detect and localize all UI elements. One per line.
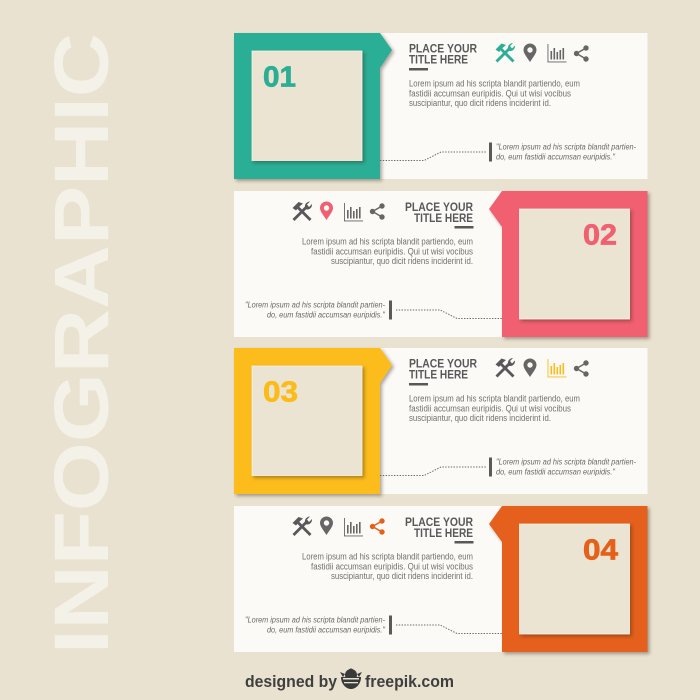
icon: share	[370, 519, 384, 534]
body text: fastidii accumsan euripidis. Qui ut wisi vocibus	[409, 404, 572, 414]
heading: TITLE HERE	[414, 211, 473, 225]
icon: tools	[292, 201, 312, 221]
quote text: "Lorem ipsum ad his scripta blandit partien-	[496, 142, 636, 152]
icon: tools	[496, 43, 515, 62]
body text: suscipiantur, quo dicit ridens inciderint id.	[409, 98, 551, 108]
heading: PLACE YOUR	[405, 200, 473, 214]
inner card	[252, 366, 362, 476]
pink tab with arrow	[489, 191, 648, 337]
quote text	[496, 456, 636, 476]
icon: tools	[496, 358, 515, 378]
inner card	[252, 51, 362, 160]
panel: step 01	[234, 33, 648, 179]
icon: freepik logo	[340, 668, 362, 689]
quote bar	[489, 142, 492, 162]
inner card	[520, 524, 630, 634]
heading underline	[409, 68, 428, 70]
quote text: do, eum fastidii accumsan euripidis."	[496, 466, 616, 476]
body text: fastidii accumsan euripidis. Qui ut wisi vocibus	[311, 246, 474, 256]
icon: map pin	[524, 44, 536, 62]
quote text	[245, 614, 386, 634]
icon: map pin	[320, 202, 333, 220]
heading underline	[454, 226, 474, 228]
icon: tools	[292, 516, 312, 536]
icon: share	[574, 46, 588, 61]
heading	[409, 41, 477, 67]
heading: TITLE HERE	[409, 368, 468, 382]
icon: bar chart	[548, 44, 566, 62]
heading	[405, 515, 473, 540]
yellow tab with arrow	[234, 348, 392, 494]
number: 04	[583, 534, 618, 566]
heading underline	[409, 383, 428, 386]
icon: share	[574, 361, 588, 376]
heading: PLACE YOUR	[409, 41, 477, 55]
quote text: "Lorem ipsum ad his scripta blandit partien-	[496, 456, 636, 466]
heading underline	[454, 541, 474, 544]
icon: share	[370, 204, 384, 219]
panel: step 03	[234, 348, 648, 494]
heading: TITLE HERE	[409, 53, 468, 67]
quote text	[496, 142, 636, 162]
quote bar	[489, 458, 492, 476]
dotted connector	[380, 152, 486, 160]
body text: Lorem ipsum ad his scripta blandit partiendo, eum	[409, 394, 580, 404]
body text: suscipiantur, quo dicit ridens inciderint id.	[409, 413, 551, 423]
heading: TITLE HERE	[414, 526, 473, 540]
quote text: "Lorem ipsum ad his scripta blandit partien-	[245, 614, 385, 624]
quote bar	[389, 300, 392, 320]
quote text: do, eum fastidii accumsan euripidis."	[267, 624, 386, 634]
body text: suscipiantur, quo dicit ridens inciderint id.	[331, 571, 473, 581]
icon: bar chart	[548, 359, 566, 377]
heading: PLACE YOUR	[409, 356, 477, 370]
freepik.com text: freepik.com	[365, 672, 454, 691]
quote bar	[389, 616, 392, 634]
body text: Lorem ipsum ad his scripta blandit partiendo, eum	[302, 552, 473, 562]
body text	[302, 236, 474, 266]
dotted connector	[380, 467, 486, 476]
panel background	[234, 348, 648, 494]
heading	[409, 356, 477, 382]
teal tab with arrow	[234, 33, 392, 179]
vertical watermark title: INFOGRAPHIC	[39, 33, 125, 654]
panel background	[234, 33, 648, 179]
body text	[302, 552, 474, 581]
icon: bar chart	[344, 518, 363, 536]
body text: suscipiantur, quo dicit ridens inciderint id.	[331, 256, 473, 266]
panel background	[234, 191, 648, 337]
panel background	[234, 506, 648, 652]
quote text: do, eum fastidii accumsan euripidis."	[267, 310, 386, 320]
body text: Lorem ipsum ad his scripta blandit partiendo, eum	[302, 236, 473, 246]
panel: step 04	[234, 506, 648, 652]
icon: map pin	[320, 516, 333, 535]
number: 01	[263, 62, 296, 94]
number: 03	[263, 376, 298, 408]
inner card	[520, 209, 630, 319]
body text	[409, 78, 580, 108]
icon: map pin	[524, 358, 536, 377]
body text	[409, 394, 580, 423]
footer credit	[245, 668, 454, 691]
dotted connector	[396, 625, 502, 634]
body text: fastidii accumsan euripidis. Qui ut wisi vocibus	[409, 88, 572, 98]
icon: bar chart	[344, 203, 363, 221]
quote text	[245, 300, 386, 320]
quote text: "Lorem ipsum ad his scripta blandit partien-	[245, 300, 385, 310]
heading	[405, 200, 473, 225]
heading: PLACE YOUR	[405, 515, 473, 529]
quote text: do, eum fastidii accumsan euripidis."	[496, 152, 616, 162]
panel: step 02	[234, 191, 648, 337]
body text: fastidii accumsan euripidis. Qui ut wisi vocibus	[311, 562, 474, 572]
dotted connector	[396, 310, 502, 318]
designed by text: designed by	[245, 672, 338, 691]
number: 02	[583, 220, 617, 252]
body text: Lorem ipsum ad his scripta blandit partiendo, eum	[409, 78, 580, 88]
orange tab with arrow	[489, 506, 648, 652]
